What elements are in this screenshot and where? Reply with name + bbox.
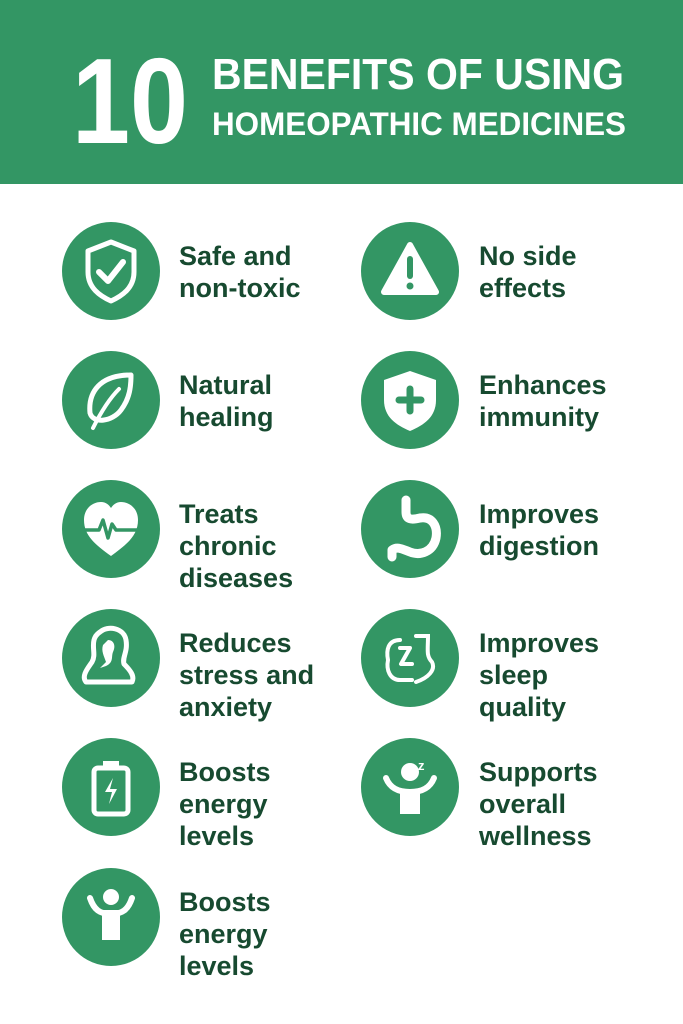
item: enhances immunity: immunity bbox=[479, 402, 599, 432]
item: boosts energy levels (2): energy bbox=[179, 919, 268, 949]
item: supports overall wellness: Supports bbox=[479, 757, 598, 787]
item: supports overall wellness: wellness bbox=[478, 821, 592, 851]
item: reduces stress: Reduces bbox=[179, 628, 292, 658]
item: supports overall wellness: overall bbox=[479, 789, 566, 819]
title line 2: HOMEOPATHIC MEDICINES bbox=[212, 106, 626, 142]
item: improves sleep quality bbox=[361, 609, 599, 722]
item: supports overall wellness: z bbox=[418, 758, 425, 773]
item: natural healing: healing bbox=[179, 402, 274, 432]
item: improves sleep quality: sleep bbox=[479, 660, 548, 690]
title number: 10 bbox=[72, 33, 188, 169]
item: treats chronic diseases: Treats bbox=[179, 499, 259, 529]
item: safe and non-toxic: Safe and bbox=[179, 241, 292, 271]
item: improves digestion: digestion bbox=[479, 531, 599, 561]
item: boosts energy levels (2): Boosts bbox=[179, 887, 271, 917]
item: no side effects: No side bbox=[479, 241, 577, 271]
item: natural healing: Natural bbox=[179, 370, 272, 400]
item: safe and non-toxic bbox=[62, 222, 300, 320]
item: improves sleep quality: quality bbox=[479, 692, 566, 722]
item: boosts energy levels bbox=[62, 738, 271, 851]
item: improves sleep quality: Improves bbox=[479, 628, 599, 658]
item: treats chronic diseases bbox=[62, 480, 293, 593]
item: treats chronic diseases: chronic bbox=[179, 531, 277, 561]
header band bbox=[0, 0, 683, 184]
item: enhances immunity bbox=[361, 351, 607, 449]
item: boosts energy levels (2): levels bbox=[179, 951, 254, 981]
item: boosts energy levels: energy bbox=[179, 789, 268, 819]
item: reduces stress: stress and bbox=[179, 660, 314, 690]
item: natural healing bbox=[62, 351, 274, 449]
item: supports overall wellness bbox=[361, 738, 598, 851]
item: treats chronic diseases: diseases bbox=[179, 563, 293, 593]
item: reduces stress: anxiety bbox=[179, 692, 272, 722]
item: enhances immunity: Enhances bbox=[479, 370, 607, 400]
item: improves digestion bbox=[361, 480, 599, 578]
item: boosts energy levels: levels bbox=[179, 821, 254, 851]
item: safe and non-toxic: non-toxic bbox=[179, 273, 300, 303]
title line 1: BENEFITS OF USING bbox=[212, 50, 624, 99]
item: boosts energy levels: Boosts bbox=[179, 757, 271, 787]
item: no side effects bbox=[361, 222, 577, 320]
item: reduces stress bbox=[62, 609, 314, 722]
item: boosts energy levels (2) bbox=[62, 868, 271, 981]
item: no side effects: effects bbox=[479, 273, 566, 303]
item: improves digestion: Improves bbox=[479, 499, 599, 529]
